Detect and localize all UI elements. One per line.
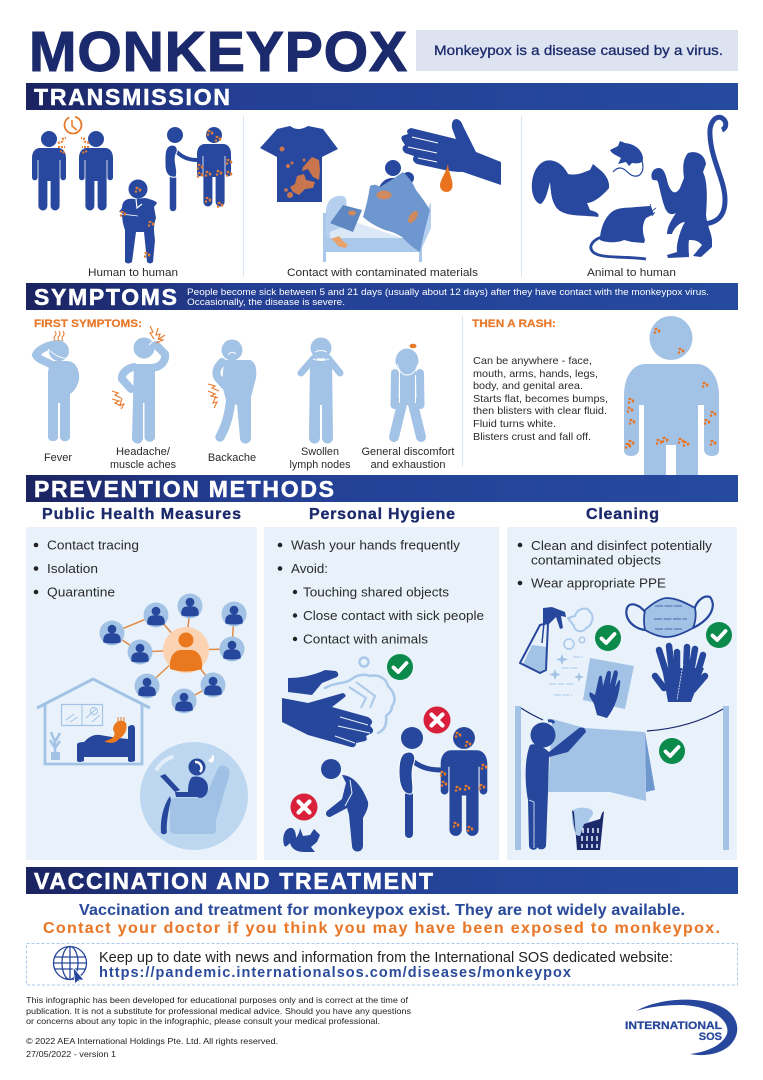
intro box [416,30,738,71]
label: Animal to human [587,267,676,279]
rash description: mouth, arms, hands, legs, [473,368,598,380]
bullet list: Contact with animals [303,632,429,646]
section header: vaccination and treatment: VACCINATION AND TREATMENT [34,868,433,894]
icon: face mask [626,597,713,637]
icon: contact tracing network [100,594,246,714]
heading: public health measures: Public Health Measures [42,506,241,523]
icon: hand with drop [401,119,501,192]
icon: mouse [610,141,643,176]
section header: transmission: TRANSMISSION [34,84,230,110]
website callout: https://pandemic.internationalsos.com/diseases/monkeypox [99,965,571,981]
rash description: Starts flat, becomes bumps, [473,393,608,405]
section header: prevention methods: PREVENTION METHODS [34,476,334,502]
icon: stained t-shirt [260,126,338,202]
panel: contaminated materials [260,119,501,279]
symptoms intro text: Occasionally, the disease is severe. [187,297,345,308]
symptom: swollen lymph nodes: lymph nodes [290,459,351,471]
bullet list: Wash your hands frequently [291,538,461,552]
symptom: general discomfort and exhaustion: General discomfort [362,446,454,458]
icon: sick person under blanket in bed [323,160,431,262]
disclaimer: This infographic has been developed for educational purposes only and is correct at the time of [26,995,409,1005]
heading: then a rash: THEN A RASH: [472,318,556,330]
disclaimer: or concerns about any topic in the infographic, please consult your medical professional. [26,1016,380,1026]
heading: first symptoms: FIRST SYMPTOMS: [34,318,142,330]
section header: symptoms: SYMPTOMS [34,284,177,310]
logo: International SOS: SOS [699,1031,722,1043]
bullet list [278,538,484,646]
bullet list [518,538,713,590]
rash description: Fluid turns white. [473,418,556,430]
symptom: backache [208,340,256,464]
symptom: backache: Backache [208,452,256,464]
icon: monkey [651,117,726,258]
heading: cleaning: Cleaning [586,506,659,523]
icon: person touching sick person [165,127,232,208]
icon: person touching sick person [399,706,487,836]
symptom: fever [36,331,79,464]
rash description: Blisters crust and fall off. [473,431,591,443]
symptom: fever: Fever [44,452,72,464]
website callout [26,944,738,985]
symptom: swollen lymph nodes [290,338,351,471]
heading: personal hygiene: Personal Hygiene [309,506,455,523]
icon: person bending to squirrel [283,759,368,852]
panel: human to human [32,116,232,279]
bullet list [34,538,139,600]
section header: vaccination and treatment [26,867,738,894]
bullet list: Avoid: [291,561,328,576]
section header: transmission [26,83,738,110]
bullet list: Clean and disinfect potentially [531,538,713,553]
icon: isolation at home [37,679,150,764]
symptom: headache and muscle aches [110,326,176,471]
icon: figure with rash [624,316,719,475]
icon: globe with cursor [54,946,86,984]
panel: public health measures [26,527,257,860]
symptom: swollen lymph nodes: Swollen [301,446,339,458]
symptom: headache and muscle aches: Headache/ [116,446,171,458]
icon: laundry line [515,706,729,850]
label: Human to human [88,267,178,279]
section header: prevention methods [26,475,738,502]
icon: rat [591,204,656,259]
rash description: then blisters with clear fluid. [473,405,607,417]
bullet list: Quarantine [47,584,115,600]
copyright: © 2022 AEA International Holdings Pte. Ltd. All rights reserved. [26,1036,278,1046]
contact your doctor message: Contact your doctor if you think you may have been exposed to monkeypox. [43,920,720,937]
bullet list: Contact tracing [47,538,139,552]
section header: symptoms [26,283,738,310]
symptom: general discomfort and exhaustion: and exhaustion [370,459,446,471]
rash description: Can be anywhere - face, [473,355,592,367]
panel: animal to human [532,117,726,279]
icon: squirrel [532,160,609,217]
logo: International SOS: INTERNATIONAL [625,1020,722,1032]
icon: two people breathing with clock [32,116,113,210]
symptom: headache and muscle aches: muscle aches [110,459,176,471]
icon: spray bottle [520,607,621,695]
title: MONKEYPOX [29,20,407,84]
icon: person in bubble [140,742,248,850]
symptom: general discomfort and exhaustion [362,344,454,471]
symptoms intro text: People become sick between 5 and 21 days (usually about 12 days) after they have contact with the monkeypox virus. [187,287,709,298]
label: Contact with contaminated materials [287,267,479,279]
bullet list: Touching shared objects [303,584,450,600]
intro box: Monkeypox is a disease caused by a virus. [434,42,723,58]
logo: International SOS [625,1000,737,1055]
panel: cleaning [507,527,737,860]
icon: washing hands [282,654,413,747]
bullet list: Wear appropriate PPE [531,576,666,590]
vaccination message: Vaccination and treatment for monkeypox exist. They are not widely available. [79,902,685,919]
icon: gloves [655,622,732,702]
bullet list: Close contact with sick people [303,608,484,623]
rash description: body, and genital area. [473,380,583,392]
disclaimer: publication. It is not a substitute for professional medical advice. Should you have any questions [26,1006,411,1016]
website callout: Keep up to date with news and information from the International SOS dedicated website: [99,950,673,966]
panel: personal hygiene [264,527,499,860]
bullet list: contaminated objects [531,552,662,568]
icon: two people hugging [119,180,157,264]
bullet list: Isolation [47,561,98,576]
date and version: 27/05/2022 - version 1 [26,1049,116,1059]
icon: cloth and hand [583,658,634,718]
